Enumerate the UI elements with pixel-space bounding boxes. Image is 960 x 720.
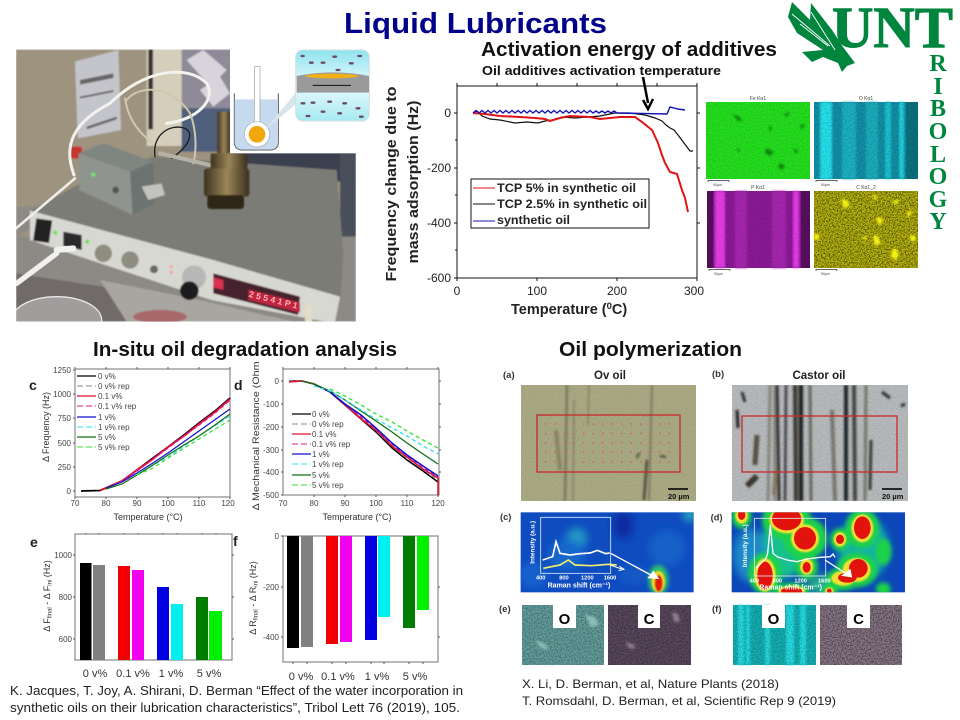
chart d: mechanical resistance curves: Δ Mechanical Resistance (Ohm <box>251 362 261 510</box>
legend: 0.1 v% <box>98 392 122 401</box>
legend: TCP 5% in synthetic oil <box>497 183 636 195</box>
bar chart f: - Δ R <box>248 586 258 609</box>
legend: 0 v% <box>98 372 116 381</box>
map: P: P Kα1 <box>751 185 765 191</box>
axis tick labels: -400 <box>427 216 451 230</box>
chart c: frequency curves <box>29 366 235 522</box>
Raman inset <box>530 517 658 590</box>
legend: 0.1 v% <box>312 430 336 439</box>
display readout: 2 5 5 4 1 P 1 <box>248 289 299 311</box>
bar chart f <box>233 532 440 683</box>
map: O: 50µm <box>821 183 830 187</box>
chart d: mechanical resistance curves: 100 <box>369 499 383 508</box>
vertical word: tribology: O <box>929 164 947 190</box>
chart c: frequency curves: Δ Frequency (Hz) <box>41 392 51 462</box>
map: O <box>522 605 604 665</box>
bars <box>287 536 429 648</box>
map: O: O <box>768 611 780 628</box>
panel e: EDS maps, Ov oil <box>499 604 691 665</box>
panel f: EDS maps, Castor oil: (f) <box>712 604 722 615</box>
map: Fe <box>706 96 810 187</box>
map: O <box>814 96 918 187</box>
citation: Jacques et al: synthetic oils on their lubrication characteristics”, Tribol Lett 76 (2019), 105. <box>10 701 460 715</box>
bar chart e: 1000 <box>54 551 73 560</box>
chart c: frequency curves: 1250 <box>53 366 72 375</box>
Raman inset: 400 <box>536 576 545 582</box>
category labels: 1 v% <box>365 671 389 683</box>
chart c: frequency curves: 80 <box>102 499 111 508</box>
arrow <box>643 77 653 109</box>
Raman inset: 800 <box>773 578 782 584</box>
map: O: O Kα1 <box>859 96 873 102</box>
chart c: frequency curves: 750 <box>58 414 72 423</box>
title: Liquid Lubricants <box>344 8 607 40</box>
vertical word: tribology: G <box>929 187 948 213</box>
UNT logo <box>788 0 953 235</box>
icon: eagle <box>788 2 855 72</box>
citation: Li and Romsdahl: X. Li, D. Berman, et al, Nature Plants (2018) <box>522 677 779 691</box>
line chart: frequency change vs temperature <box>384 77 704 318</box>
legend: 5 v% <box>98 433 116 442</box>
map: C: C <box>853 611 864 628</box>
chart d: mechanical resistance curves <box>234 362 445 522</box>
map: C: 50µm <box>821 272 830 276</box>
y axis label: Frequency change due to <box>384 86 400 282</box>
panel c: Raman map, Ov oil <box>500 509 697 595</box>
vertical word: tribology: R <box>929 51 947 77</box>
legend: synthetic oil <box>497 215 570 227</box>
heading: activation energy: Activation energy of additives <box>481 39 777 61</box>
legend: 1 v% <box>98 413 116 422</box>
bar chart f: (Hz) <box>248 561 258 581</box>
bar chart e: e <box>30 534 38 550</box>
chart d: mechanical resistance curves: -100 <box>263 400 280 409</box>
panel b: Castor oil micrograph <box>712 369 908 501</box>
bar chart f: final <box>254 609 260 620</box>
bar chart e: Δ F <box>42 618 52 632</box>
x axis label: Temperature ( <box>511 302 607 318</box>
vertical word: tribology: I <box>933 74 943 100</box>
bar chart e: 800 <box>59 593 73 602</box>
legend: TCP 2.5% in synthetic oil <box>497 199 647 211</box>
map: P <box>707 185 810 276</box>
chart c: frequency curves: 0 <box>67 487 72 496</box>
curve: TCP 2.5% <box>473 111 693 151</box>
zoom bubble <box>296 50 369 121</box>
mapping area box <box>537 415 680 472</box>
Raman inset: Raman shift (cm⁻¹) <box>759 585 822 592</box>
bar chart f: ini <box>254 581 260 587</box>
chart c: frequency curves: 110 <box>193 499 206 508</box>
legend: 0 v% <box>312 410 330 419</box>
legend <box>292 410 351 490</box>
legend: 1 v% <box>312 450 330 459</box>
panel c: Raman map, Ov oil: (c) <box>500 512 511 522</box>
category labels: 5 v% <box>403 671 427 683</box>
map: C <box>608 605 691 665</box>
chart d: mechanical resistance curves: 0 <box>275 377 280 386</box>
map: C: C <box>644 611 655 628</box>
map: O <box>733 605 816 665</box>
bar chart f: f <box>233 533 238 549</box>
curves <box>289 381 438 495</box>
chart d: mechanical resistance curves: 110 <box>401 499 414 508</box>
panel a: Ov oil micrograph: Ov oil <box>594 370 626 382</box>
Raman inset: 1600 <box>604 576 616 582</box>
curves <box>81 398 230 491</box>
category labels: 0 v% <box>289 671 313 683</box>
panel d: Raman map, Castor oil <box>711 512 905 592</box>
chart c: frequency curves: Temperature (°C) <box>113 512 183 522</box>
inset: QCM in oil schematic <box>230 40 370 153</box>
chart c: frequency curves: 250 <box>58 463 72 472</box>
Raman inset: 400 <box>750 578 759 584</box>
bar chart f: -400 <box>263 633 280 642</box>
category labels: 0.1 v% <box>116 668 150 680</box>
panel b: Castor oil micrograph: (b) <box>712 369 724 380</box>
chart c: frequency curves: 120 <box>221 499 235 508</box>
citation: Jacques et al <box>10 684 463 715</box>
citation: Li and Romsdahl: T. Romsdahl, D. Berman, et al, Scientific Rep 9 (2019) <box>522 694 836 708</box>
legend: 0 v% rep <box>312 420 344 429</box>
category labels <box>83 668 221 680</box>
bar chart e: 600 <box>59 635 73 644</box>
chart d: mechanical resistance curves: d <box>234 377 243 393</box>
Raman inset: 800 <box>559 576 569 582</box>
y axis label: mass adsorption (Hz) <box>406 100 422 264</box>
photo: QCM instrument <box>12 49 356 343</box>
map: O: O <box>559 611 571 628</box>
vertical word: tribology: L <box>930 142 946 168</box>
curve: TCP 5% <box>473 113 688 212</box>
bar chart e: (Hz) <box>42 560 52 580</box>
chart d: mechanical resistance curves: -400 <box>263 468 280 477</box>
scale bar: 20 µm <box>668 492 690 501</box>
category labels <box>289 671 427 683</box>
vertical word: tribology <box>929 51 948 235</box>
axis tick labels: -200 <box>427 161 451 175</box>
chart c: frequency curves: 90 <box>133 499 142 508</box>
chart d: mechanical resistance curves: 90 <box>341 499 350 508</box>
map: P: 50µm <box>714 272 723 276</box>
EDS elemental maps <box>706 96 918 276</box>
legend: 5 v% rep <box>98 443 130 452</box>
chart c: frequency curves: c <box>29 377 37 393</box>
chart c: frequency curves: 500 <box>58 439 72 448</box>
heading: in-situ degradation: In-situ oil degradation analysis <box>93 339 397 361</box>
y axis label <box>384 86 422 281</box>
vertical word: tribology: Y <box>929 209 947 235</box>
legend: 5 v% rep <box>312 481 344 490</box>
legend <box>471 179 649 228</box>
bar chart f: -200 <box>263 583 280 592</box>
scale bar: 20 µm <box>882 492 904 501</box>
map: C: C Kα1_2 <box>856 185 876 191</box>
category labels: 5 v% <box>197 668 221 680</box>
chart d: mechanical resistance curves: 120 <box>431 499 445 508</box>
x axis label: 0 <box>607 301 612 312</box>
axis tick labels <box>427 106 704 298</box>
subheading: activation temperature: Oil additives activation temperature <box>482 63 721 78</box>
Raman inset: Intensity (a.u.) <box>742 524 749 567</box>
legend: 5 v% <box>312 471 330 480</box>
chart c: frequency curves: 1000 <box>53 390 72 399</box>
axis tick labels: 100 <box>527 284 547 298</box>
bar chart e <box>30 533 234 680</box>
chart d: mechanical resistance curves: -300 <box>263 446 280 455</box>
axis tick labels: 300 <box>684 284 704 298</box>
legend <box>77 372 137 452</box>
x axis label: C) <box>612 302 627 318</box>
cables <box>16 72 217 283</box>
panel a: Ov oil micrograph: (a) <box>503 370 515 381</box>
legend: 0 v% rep <box>98 382 130 391</box>
chart c: frequency curves: 100 <box>161 499 175 508</box>
Raman inset <box>742 518 851 592</box>
curve: synthetic oil <box>473 107 685 114</box>
vertical word: tribology: B <box>930 96 946 122</box>
bar chart e: final <box>48 607 54 618</box>
map: C <box>820 605 902 665</box>
mapping area box <box>742 416 897 472</box>
chart d: mechanical resistance curves: Temperature (°C) <box>322 512 392 522</box>
Raman inset: 1200 <box>794 578 807 584</box>
category labels: 0 v% <box>83 668 107 680</box>
axis tick labels: 0 <box>444 106 451 120</box>
category labels: 1 v% <box>159 668 183 680</box>
bar chart f: 0 <box>275 532 280 541</box>
category labels: 0.1 v% <box>321 671 355 683</box>
citation: Li and Romsdahl <box>522 677 836 708</box>
chart d: mechanical resistance curves: -500 <box>263 491 280 500</box>
chart d: mechanical resistance curves: 70 <box>279 499 288 508</box>
chart d: mechanical resistance curves: -200 <box>263 423 280 432</box>
vertical word: tribology: O <box>929 119 947 145</box>
legend: 1 v% rep <box>312 460 344 469</box>
citation: Jacques et al: K. Jacques, T. Joy, A. Shirani, D. Berman “Effect of the water incorporation in <box>10 684 463 698</box>
panel d: Raman map, Castor oil: (d) <box>711 513 723 523</box>
axis tick labels: 200 <box>607 284 627 298</box>
panel f: EDS maps, Castor oil <box>712 604 902 665</box>
bars <box>80 563 222 660</box>
legend: 0.1 v% rep <box>312 440 351 449</box>
map: C <box>814 185 918 276</box>
beaker <box>234 93 278 150</box>
bar chart e: ini <box>48 580 54 586</box>
bar chart f: Δ R <box>248 620 258 635</box>
panel e: EDS maps, Ov oil: (e) <box>499 604 511 615</box>
Raman inset: 1200 <box>581 576 594 582</box>
bar chart e: - Δ F <box>42 585 52 607</box>
map: Fe: 50µm <box>713 183 722 187</box>
panel a: Ov oil micrograph <box>503 370 696 501</box>
legend: 1 v% rep <box>98 423 130 432</box>
legend: 0.1 v% rep <box>98 402 137 411</box>
Raman inset: 1600 <box>818 578 831 584</box>
map: Fe: Fe Kα1 <box>750 96 766 102</box>
panel b: Castor oil micrograph: Castor oil <box>792 370 846 382</box>
axis tick labels: -600 <box>427 271 451 285</box>
chart c: frequency curves: 70 <box>71 499 80 508</box>
Raman inset: Intensity (a.u.) <box>530 521 537 564</box>
Raman inset: Raman shift (cm⁻¹) <box>548 583 610 590</box>
heading: oil polymerization: Oil polymerization <box>559 339 742 361</box>
chart d: mechanical resistance curves: 80 <box>310 499 319 508</box>
axis tick labels: 0 <box>454 284 461 298</box>
